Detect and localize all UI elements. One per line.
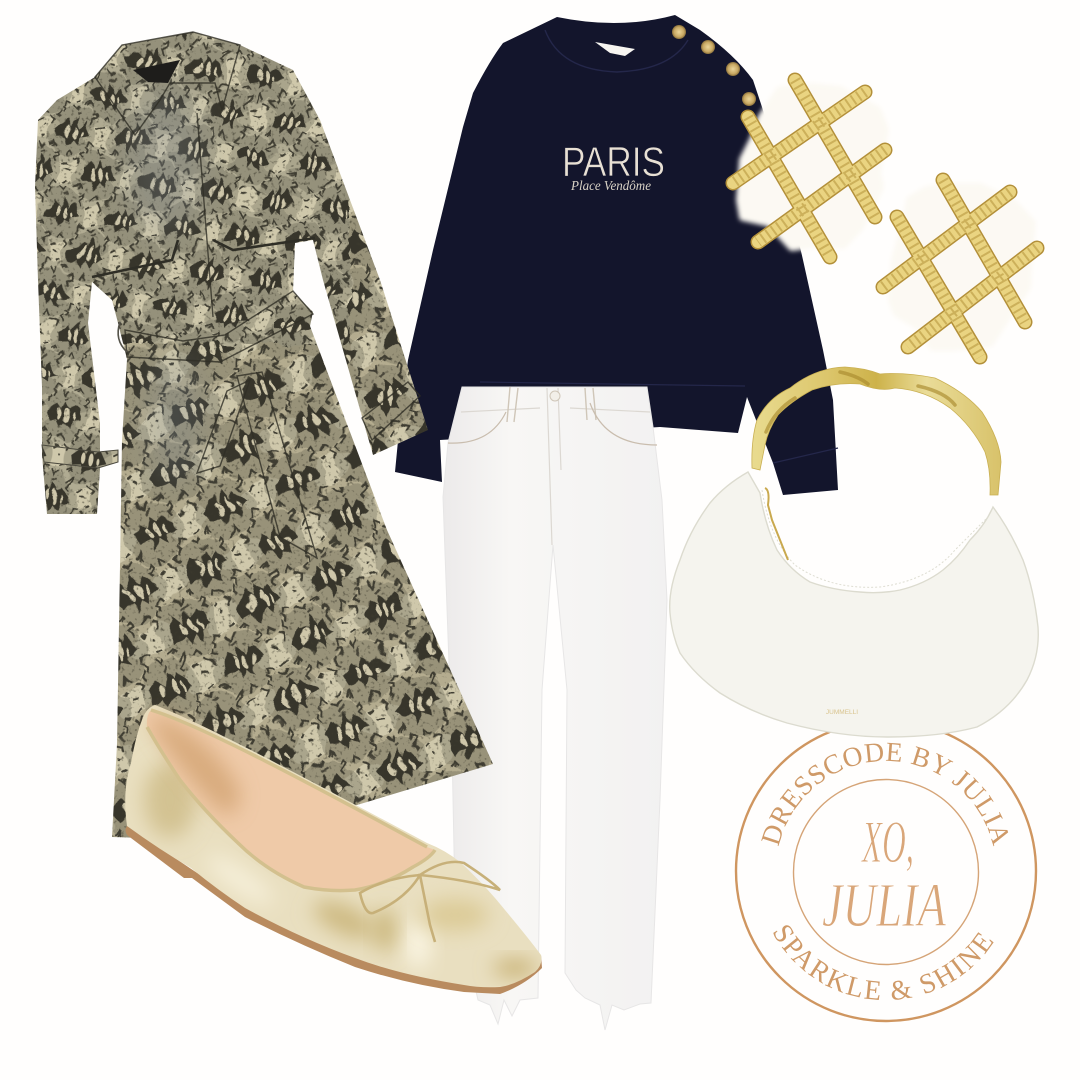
handle highlights <box>766 372 955 432</box>
stamp bottom text: SPARKLE & SHINE <box>773 925 994 1000</box>
navy sweatshirt <box>395 15 838 495</box>
right cuff strap <box>362 382 420 440</box>
left cuff strap <box>42 445 118 468</box>
sweatshirt body <box>395 15 838 495</box>
coat placket <box>197 113 213 317</box>
snakeskin trench coat <box>35 31 493 838</box>
earring right <box>883 180 1037 357</box>
coat collar edge <box>95 32 240 135</box>
belt ring <box>118 322 127 352</box>
fly and waistband <box>461 388 650 545</box>
shoulder buttons <box>672 25 756 106</box>
bag logo: JUMMELLI <box>826 709 858 716</box>
PARIS text: PARIS <box>562 138 665 185</box>
coat storm flaps <box>92 238 315 277</box>
coat neck label <box>133 60 180 83</box>
jeans silhouette <box>443 387 667 1030</box>
shoe bow <box>360 862 500 942</box>
cuff rib <box>773 448 838 463</box>
shoe upper <box>125 705 541 987</box>
stamp outer ring <box>736 721 1036 1021</box>
white crescent handbag <box>670 367 1038 737</box>
shoe rim <box>147 710 435 891</box>
pockets <box>448 403 657 445</box>
belt tail long edge <box>237 372 317 558</box>
shoe insole <box>147 710 435 891</box>
stamp: Dresscode by Julia <box>734 732 1038 1022</box>
belt tail short edge <box>197 380 250 473</box>
coat belt edge <box>125 291 313 362</box>
gold rope earrings <box>733 80 1037 357</box>
bag zip stitching <box>762 490 990 587</box>
metallic shading <box>144 762 537 976</box>
waist button <box>550 391 560 401</box>
white jeans <box>443 387 667 1030</box>
stamp script XO: XO, <box>861 809 914 875</box>
stamp top text: DRESSCODE BY JULIA <box>761 742 1008 846</box>
stamp script Julia: JULIA <box>822 872 947 940</box>
twisted gold handle <box>752 367 1001 495</box>
ballet flat shoe <box>125 705 542 994</box>
belt loops <box>507 387 596 422</box>
neck rib <box>545 30 688 72</box>
hem rib <box>480 382 745 386</box>
earring left <box>733 80 885 257</box>
sole <box>126 826 542 994</box>
bag body <box>670 472 1038 737</box>
bag zip pull <box>765 488 788 560</box>
neck label <box>595 42 635 56</box>
Place Vendome text: Place Vendôme <box>570 179 651 194</box>
insole heel shadow <box>152 715 240 815</box>
coat body and sleeves <box>35 32 493 838</box>
stamp inner ring <box>794 780 978 964</box>
